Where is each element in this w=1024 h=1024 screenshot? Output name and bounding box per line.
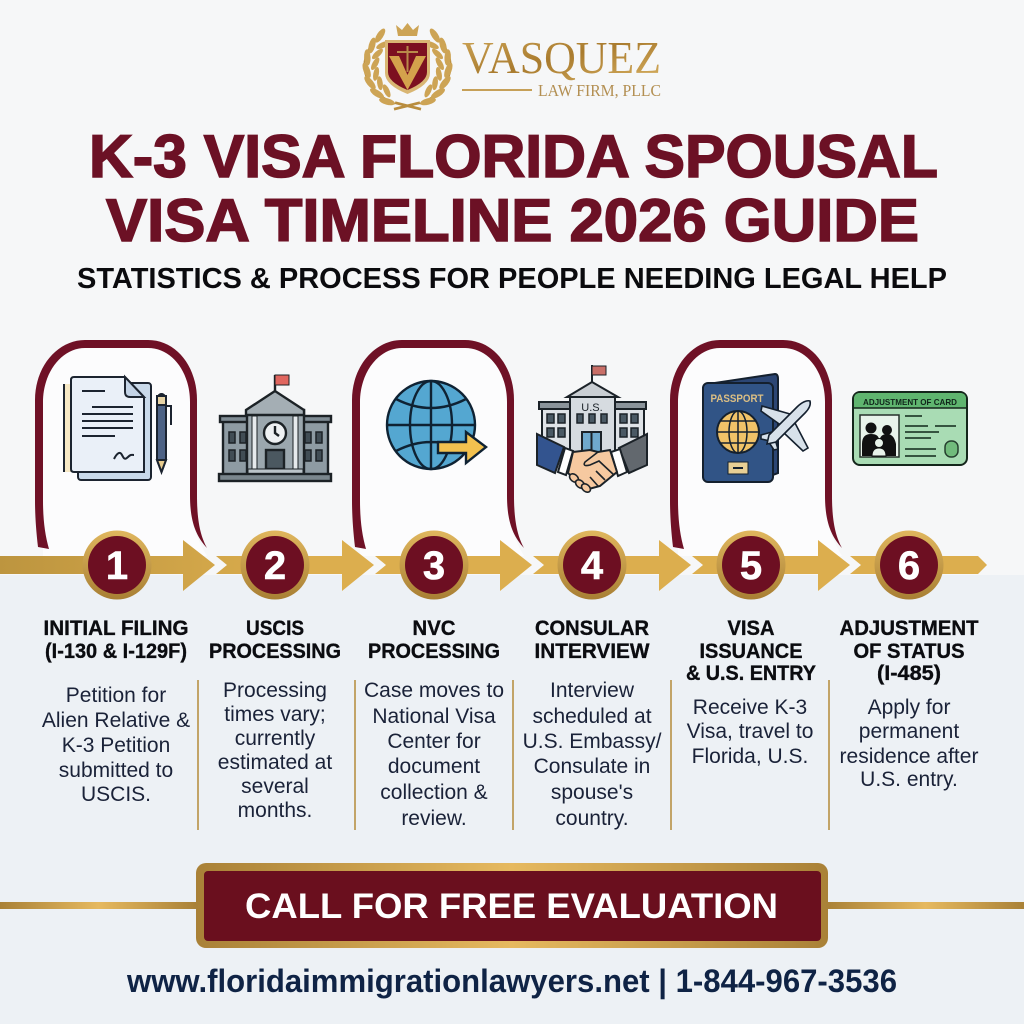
heading [368, 617, 500, 663]
description: estimated at [218, 751, 332, 774]
description: spouse's [551, 781, 633, 804]
arch: step 3 [352, 340, 524, 556]
icon: shield [385, 40, 430, 94]
website and phone: www.floridaimmigrationlawyers.net | 1-844-967-3536 [126, 963, 897, 999]
step number 2: 2 [264, 544, 286, 588]
step number 6 [874, 530, 944, 600]
description: Interview [550, 679, 635, 702]
step number 5 [716, 530, 786, 600]
icon: adjustment of status card [853, 392, 967, 465]
description [364, 679, 504, 830]
heading: (I-485) [877, 662, 941, 685]
description: review. [401, 807, 467, 830]
logo wordmark: VASQUEZ [462, 32, 661, 83]
description: Petition for [66, 684, 166, 707]
icon: laurel wreath [361, 27, 454, 109]
call to action button: CALL FOR FREE EVALUATION [245, 887, 778, 926]
step 2 text [209, 617, 341, 822]
heading [840, 617, 979, 685]
description: K-3 Petition [62, 734, 170, 757]
description: USCIS. [81, 783, 151, 806]
icon: petition documents and pen [64, 377, 171, 480]
description: U.S. entry. [860, 768, 958, 791]
heading: NVC [412, 617, 456, 640]
footer gold rules [0, 902, 1024, 909]
arch: step 5 [670, 340, 842, 556]
title: K-3 VISA FLORIDA SPOUSAL [89, 123, 938, 190]
step number 6: 6 [898, 544, 920, 588]
description: Receive K-3 [693, 696, 807, 719]
icon: passport and airplane [703, 374, 810, 482]
icon: globe with arrow [387, 381, 486, 469]
heading [686, 617, 816, 685]
heading: PROCESSING [368, 640, 500, 663]
step number 5: 5 [740, 544, 762, 588]
dividers [197, 680, 830, 830]
description: country. [555, 807, 629, 830]
heading: & U.S. ENTRY [686, 662, 816, 685]
icon: USCIS government building [219, 375, 331, 481]
heading: INTERVIEW [534, 640, 650, 663]
description: submitted to [59, 759, 173, 782]
description: permanent [859, 720, 959, 743]
icon: adjustment of status card: ADJUSTMENT OF CARD [863, 397, 957, 407]
logo rule [462, 89, 532, 91]
description: National Visa [372, 705, 496, 728]
heading: ISSUANCE [700, 640, 802, 663]
heading: INITIAL FILING [44, 617, 188, 640]
step 4 text [523, 617, 662, 830]
description [523, 679, 662, 830]
step 6 text [840, 617, 979, 791]
step 3 text [364, 617, 504, 830]
step 1 text [42, 617, 190, 806]
heading [209, 617, 341, 663]
step number 4 [558, 530, 626, 600]
heading: ADJUSTMENT [840, 617, 979, 640]
description: Visa, travel to [687, 720, 813, 743]
description: document [388, 755, 480, 778]
description [687, 696, 813, 768]
description [218, 679, 332, 822]
step number 1: 1 [106, 544, 128, 588]
step number 2 [240, 530, 310, 600]
logo: Vasquez Law Firm [361, 23, 661, 109]
description: U.S. Embassy/ [523, 730, 662, 753]
timeline arrow band [0, 540, 987, 591]
description: Apply for [868, 696, 950, 719]
icon: U.S. embassy with handshake [537, 365, 647, 494]
heading: PROCESSING [209, 640, 341, 663]
heading: CONSULAR [535, 617, 649, 640]
description: scheduled at [532, 705, 652, 728]
description: several [241, 775, 309, 798]
heading: VISA [728, 617, 774, 640]
description [840, 696, 978, 791]
step 5 text [686, 617, 816, 768]
title [89, 123, 938, 254]
heading: OF STATUS [854, 640, 964, 663]
call to action button [196, 863, 828, 948]
description [42, 684, 190, 806]
heading: (I-130 & I-129F) [45, 640, 187, 663]
title: VISA TIMELINE 2026 GUIDE [106, 187, 919, 254]
step number 1 [82, 530, 152, 600]
description: Alien Relative & [42, 709, 190, 732]
description: Case moves to [364, 679, 504, 702]
icon: crown [396, 23, 419, 36]
description: months. [238, 799, 312, 822]
description: Florida, U.S. [692, 745, 808, 768]
heading [534, 617, 650, 663]
description: collection & [380, 781, 488, 804]
step number 3 [400, 530, 468, 600]
logo subtitle: LAW FIRM, PLLC [538, 81, 661, 100]
description: residence after [840, 745, 978, 768]
description: times vary; [224, 703, 326, 726]
description: Consulate in [534, 755, 650, 778]
arch: step 1 [35, 340, 207, 556]
description: currently [235, 727, 316, 750]
description: Processing [223, 679, 327, 702]
step number 3: 3 [423, 544, 445, 588]
step number 4: 4 [581, 544, 604, 588]
subtitle: STATISTICS & PROCESS FOR PEOPLE NEEDING LEGAL HELP [77, 263, 947, 295]
description: Center for [387, 730, 481, 753]
icon: U.S. embassy with handshake: U.S. [581, 402, 603, 414]
heading: USCIS [246, 617, 304, 640]
heading [44, 617, 188, 663]
icon: passport and airplane: PASSPORT [710, 393, 764, 405]
